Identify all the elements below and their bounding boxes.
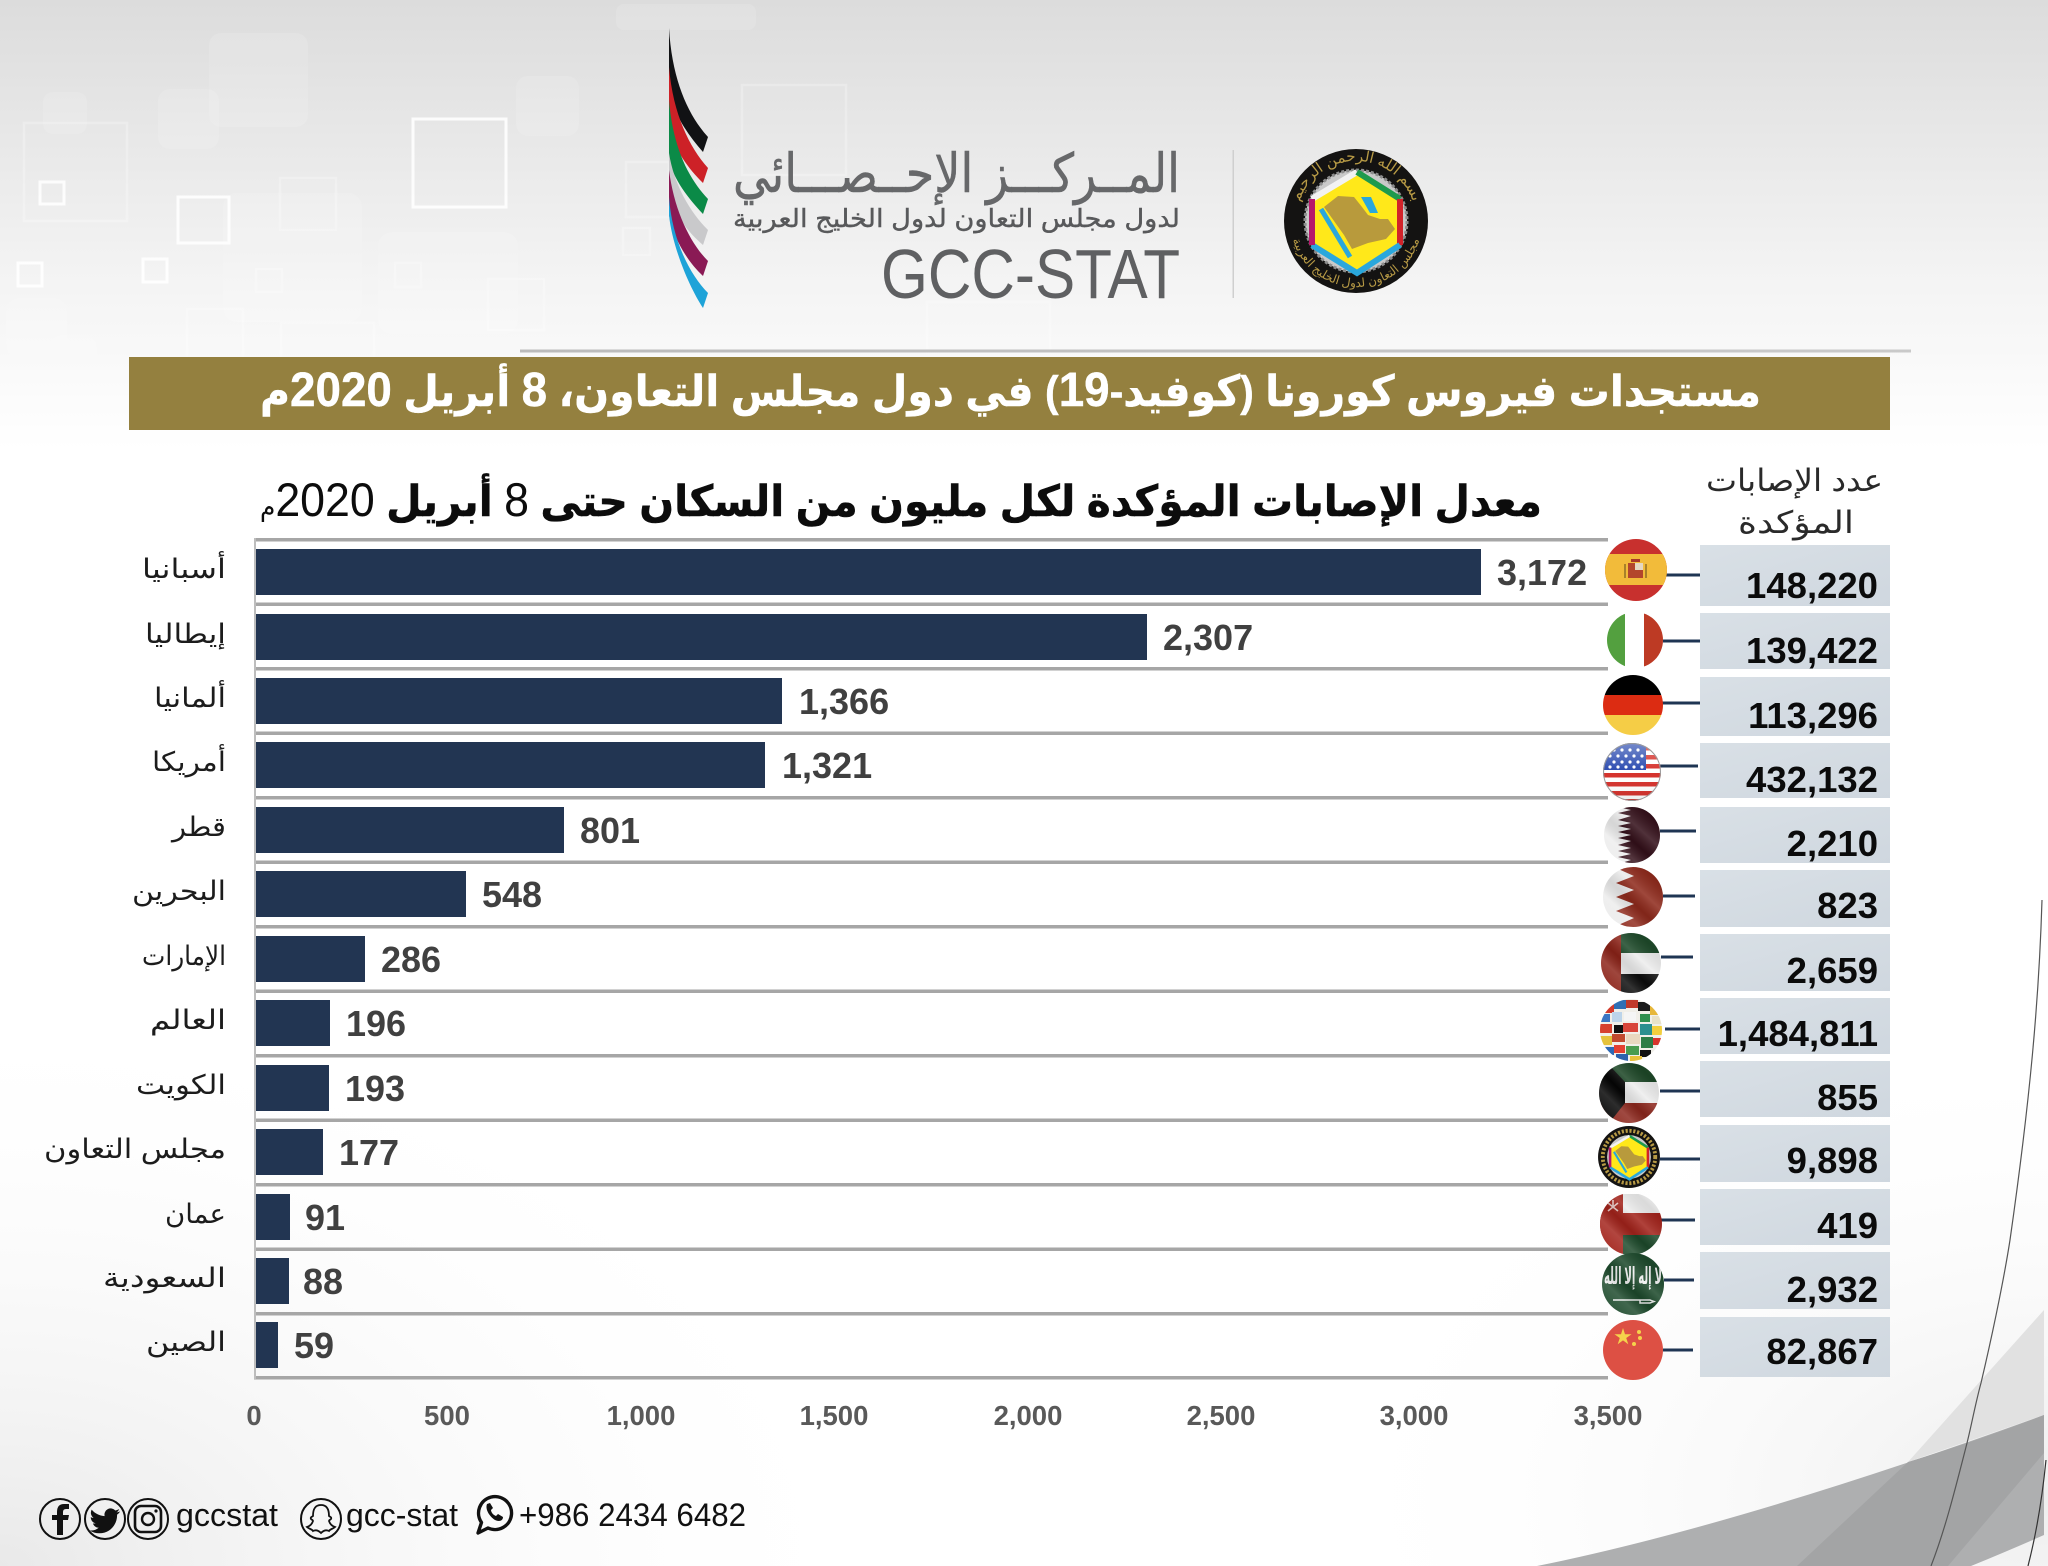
bar value labels: 196 [346, 1003, 406, 1044]
top hairline [520, 350, 1911, 352]
bar value labels: 548 [482, 874, 542, 915]
icon: GCC emblem: مجلس التعاون لدول الخليج العربية [1294, 240, 1419, 290]
case numbers: 823 [1817, 885, 1878, 926]
country labels: البحرين [132, 876, 226, 907]
logo text block [733, 144, 1180, 313]
footer handle gcc-stat: gcc-stat [346, 1497, 458, 1533]
icon: flag Spain [1605, 539, 1667, 601]
bar value labels: 2,307 [1163, 617, 1253, 658]
logo GCC-STAT: GCC-STAT [881, 235, 1180, 313]
bar value labels: 88 [303, 1261, 343, 1302]
icon: GCC emblem [1284, 149, 1428, 293]
bar value labels: 1,321 [782, 745, 872, 786]
icon: twitter [85, 1499, 125, 1539]
icon: GCC emblem: بسم الله الرحمن الرحيم [1296, 150, 1416, 202]
country labels: قطر [170, 812, 226, 843]
icon: flag Oman [1600, 1194, 1662, 1255]
case numbers: 82,867 [1766, 1331, 1878, 1372]
x axis labels: 1,000 [607, 1400, 675, 1431]
country labels: أسبانيا [142, 550, 226, 584]
country labels: مجلس التعاون [44, 1134, 226, 1165]
icon: flag UAE [1600, 933, 1664, 994]
bar value labels: 286 [381, 939, 441, 980]
country labels: الكويت [136, 1070, 226, 1101]
case numbers: 2,210 [1787, 823, 1878, 864]
icon: flag USA [1603, 743, 1661, 801]
case numbers: 419 [1817, 1205, 1878, 1246]
icon: flag Kuwait [1599, 1063, 1659, 1123]
icon: flag Italy [1607, 614, 1663, 666]
x axis labels: 2,500 [1187, 1400, 1255, 1431]
bar value labels [294, 552, 1587, 1366]
case numbers: 9,898 [1787, 1140, 1878, 1181]
bar chart [44, 538, 1642, 1431]
case numbers: 432,132 [1746, 759, 1878, 800]
chart heading: معدل الإصابات المؤكدة لكل مليون من السكان حتى 8 أبريل 2020م [260, 473, 1542, 527]
country labels: الصين [146, 1327, 226, 1358]
bars [256, 549, 1481, 1368]
case boxes [1700, 545, 1890, 1377]
bar value labels: 1,366 [799, 681, 889, 722]
bar value labels: 3,172 [1497, 552, 1587, 593]
title banner [129, 357, 1890, 430]
gridlines [254, 538, 1608, 1380]
confirmed cases column heading: عدد الإصابات [1706, 463, 1883, 499]
case numbers: 148,220 [1746, 565, 1878, 606]
icon: flag Bahrain [1603, 867, 1663, 927]
footer social contacts [40, 1497, 746, 1539]
icon: flag China [1603, 1320, 1663, 1380]
country labels: أمريكا [152, 743, 226, 778]
bar value labels: 91 [305, 1197, 345, 1238]
bar value labels: 177 [339, 1132, 399, 1173]
country labels [44, 550, 226, 1358]
x axis labels: 1,500 [800, 1400, 868, 1431]
x axis labels: 0 [246, 1400, 262, 1431]
case numbers: 855 [1817, 1077, 1878, 1118]
logo Arabic subtitle: لدول مجلس التعاون لدول الخليج العربية [733, 205, 1180, 234]
confirmed cases column [1700, 545, 1890, 1377]
confirmed cases column heading: المؤكدة [1738, 505, 1854, 541]
x axis labels: 500 [424, 1400, 470, 1431]
country labels: عمان [165, 1199, 226, 1229]
footer phone number: +986 2434 6482 [519, 1497, 746, 1533]
bar value labels: 193 [345, 1068, 405, 1109]
x axis labels: 3,500 [1574, 1400, 1642, 1431]
icon: flag Saudi Arabia [1600, 1252, 1666, 1316]
case numbers: 1,484,811 [1718, 1013, 1878, 1054]
icon: flag GCC emblem [1598, 1126, 1660, 1188]
x axis labels: 3,000 [1380, 1400, 1448, 1431]
connector lines [1660, 575, 1700, 1350]
icon: flag Qatar [1604, 807, 1660, 863]
x axis labels [246, 1400, 1642, 1431]
country labels: إيطاليا [145, 619, 226, 650]
icon: facebook [40, 1499, 80, 1539]
logo divider [1232, 150, 1234, 298]
case numbers: 139,422 [1746, 630, 1878, 671]
icon: instagram [128, 1499, 168, 1539]
bottom-right swoosh decoration [1537, 900, 2046, 1566]
case numbers: 2,932 [1787, 1269, 1878, 1310]
icon: whatsapp [478, 1497, 512, 1533]
country labels: العالم [150, 1005, 226, 1036]
icon: snapchat [301, 1499, 341, 1539]
country labels: ألمانيا [154, 679, 226, 713]
bar value labels: 801 [580, 810, 640, 851]
logo Arabic name: المــركـــز الإحــصـــائي [733, 144, 1180, 205]
confirmed cases column heading [1706, 463, 1883, 541]
x axis labels: 2,000 [994, 1400, 1062, 1431]
icon: flag Germany [1603, 675, 1663, 735]
logo ribbon [669, 28, 708, 308]
bar value labels: 59 [294, 1325, 334, 1366]
country labels: الإمارات [142, 941, 226, 972]
case numbers: 2,659 [1787, 950, 1878, 991]
banner title text: مستجدات فيروس كورونا (كوفيد-19) في دول مجلس التعاون، 8 أبريل 2020م [260, 363, 1761, 417]
case numbers [1718, 565, 1878, 1372]
text: لا إله إلا الله [1604, 1263, 1662, 1290]
icon: flag world [1598, 998, 1664, 1062]
footer handle gccstat: gccstat [176, 1497, 278, 1533]
country labels: السعودية [103, 1263, 226, 1294]
case numbers: 113,296 [1748, 695, 1878, 736]
